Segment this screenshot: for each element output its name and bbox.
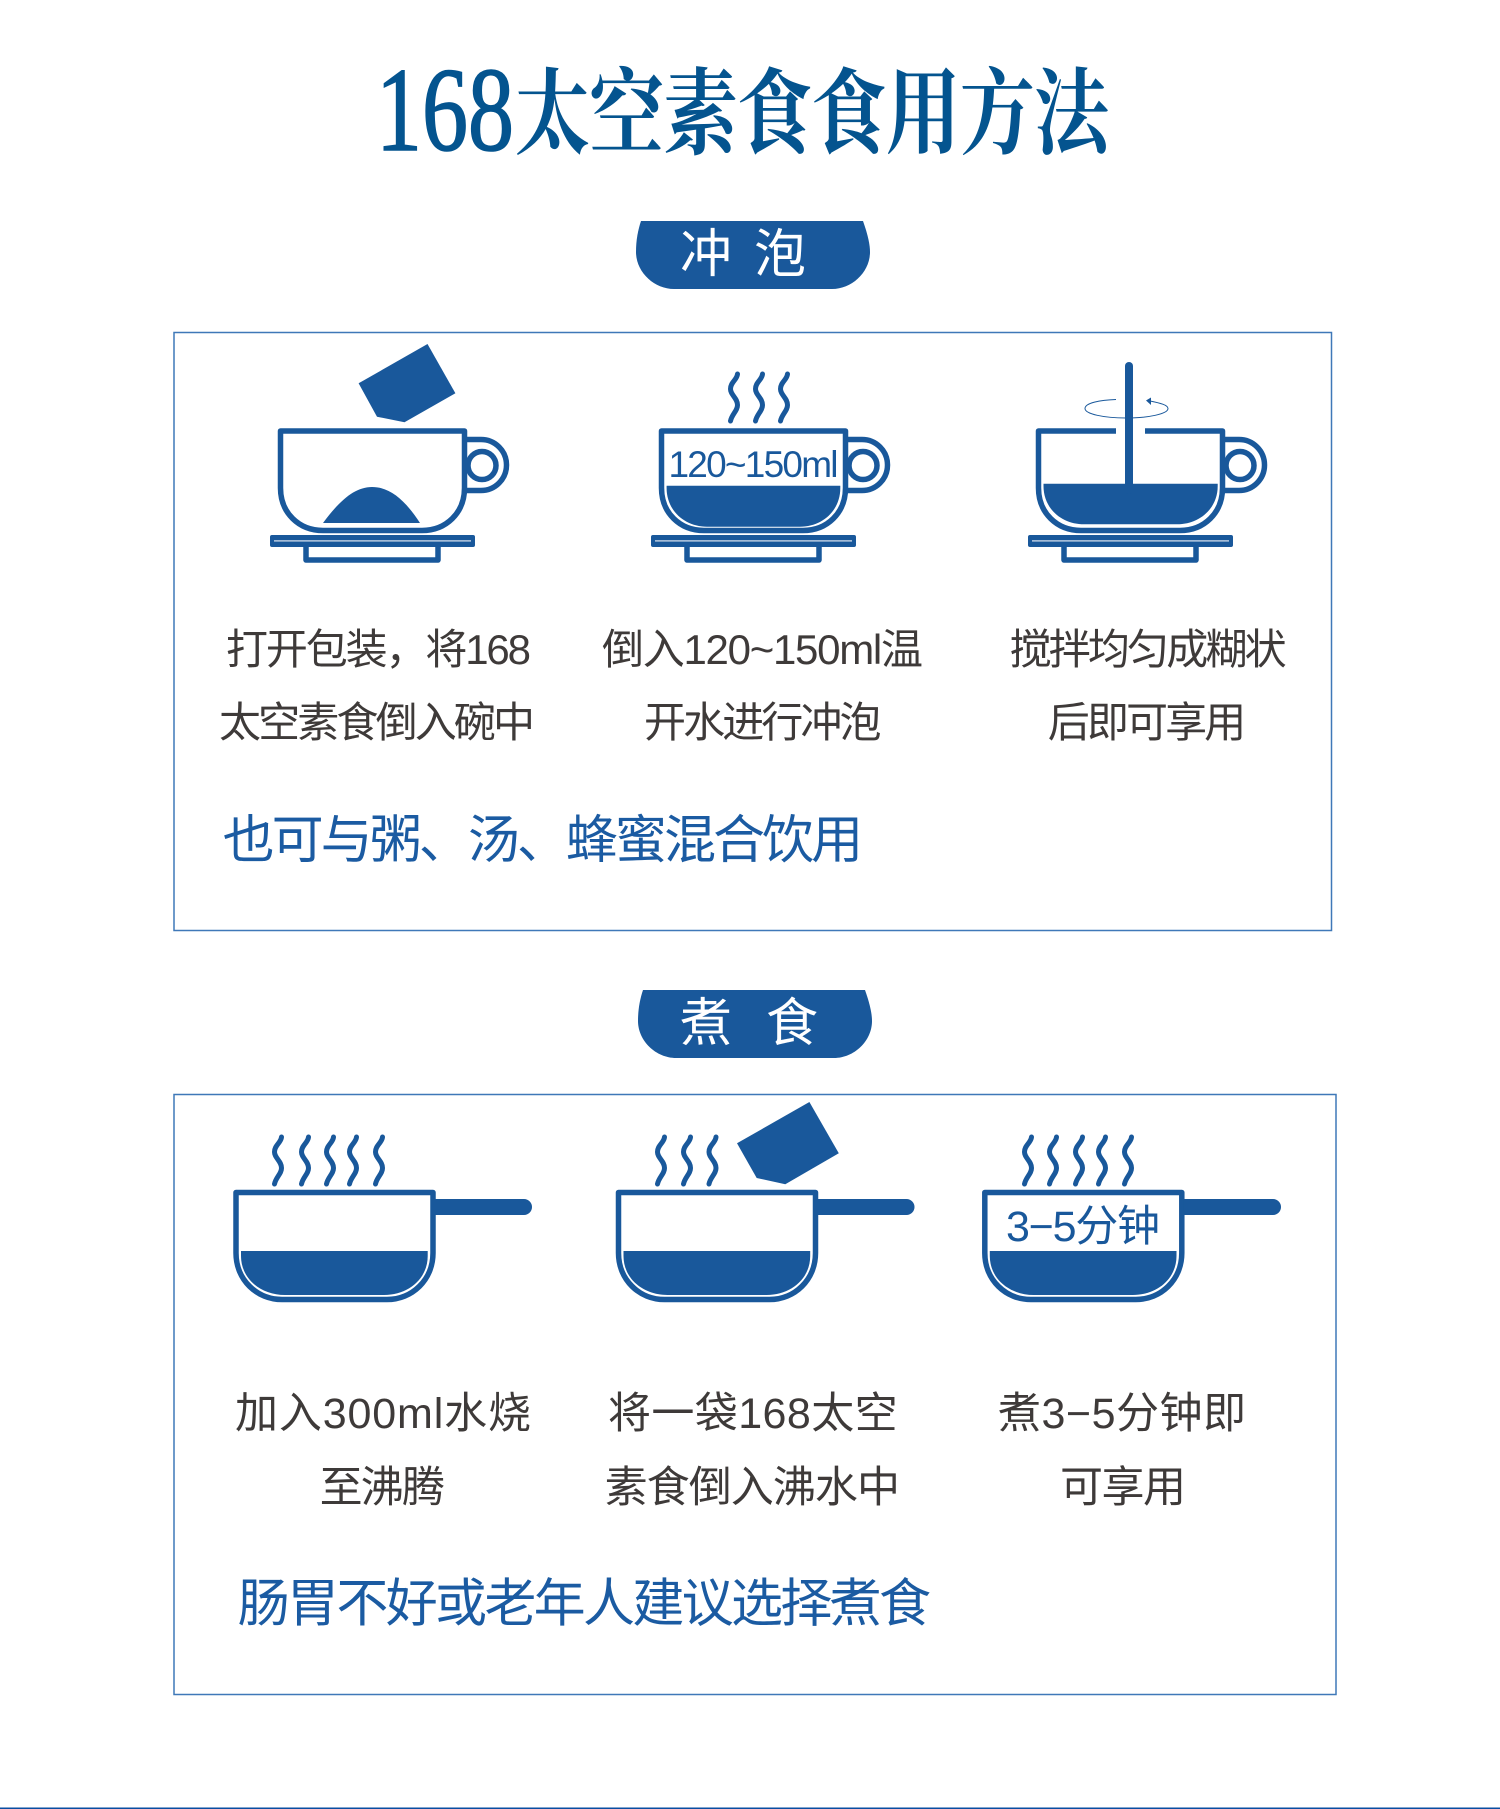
icon: cup with stirring rod [1028, 366, 1265, 560]
title: 168 [376, 45, 514, 177]
icon: pot boiling water [236, 1137, 532, 1300]
heading pill: 冲泡: 冲泡 [680, 212, 806, 287]
text: step 3 [998, 1390, 1246, 1512]
text: step 1: 至沸腾 [320, 1464, 445, 1512]
note: mixing tip: 也可与粥、汤、蜂蜜混合饮用 [223, 812, 863, 870]
text: step 3: 搅拌均匀成糊状 [1010, 626, 1287, 673]
text: step 2 [605, 1390, 900, 1512]
text: step 1: 加入300ml水烧 [235, 1390, 531, 1438]
text: step 2 [602, 626, 923, 746]
text: step 1: 太空素食倒入碗中 [219, 699, 535, 746]
text: step 3 [1010, 626, 1287, 746]
icon: pot with packet [618, 1102, 914, 1300]
text: step 1 [219, 626, 535, 746]
icon: cup with powder and packet [270, 344, 506, 560]
text: step 3: 后即可享用 [1048, 699, 1246, 746]
text: step 2: 将一袋168太空 [608, 1390, 898, 1438]
panel: 煮食 [174, 1094, 1336, 1694]
text: step 2: 开水进行冲泡 [644, 699, 882, 746]
text: step 1 [235, 1390, 531, 1512]
icon: cup with water and steam [651, 374, 888, 560]
icon: pot with timer label [985, 1137, 1281, 1300]
heading pill: 煮食 [638, 981, 872, 1058]
icon: cup with water and steam: 120~150ml [668, 444, 838, 485]
panel: 冲泡 [174, 332, 1332, 930]
text: step 2: 倒入120~150ml温 [602, 626, 923, 673]
heading pill: 煮食: 煮食 [680, 981, 818, 1056]
text: step 2: 素食倒入沸水中 [605, 1464, 900, 1512]
text: step 3: 煮3−5分钟即 [998, 1390, 1246, 1438]
heading pill: 冲泡 [636, 212, 870, 289]
icon: pot with timer label: 3−5分钟 [1006, 1203, 1160, 1251]
note: cooking tip: 肠胃不好或老年人建议选择煮食 [238, 1576, 931, 1634]
bottom rule [0, 1808, 1500, 1809]
title: 太空素食食用方法 [515, 39, 1114, 174]
text: step 1: 打开包装，将168 [226, 626, 531, 673]
text: step 3: 可享用 [1060, 1464, 1186, 1512]
